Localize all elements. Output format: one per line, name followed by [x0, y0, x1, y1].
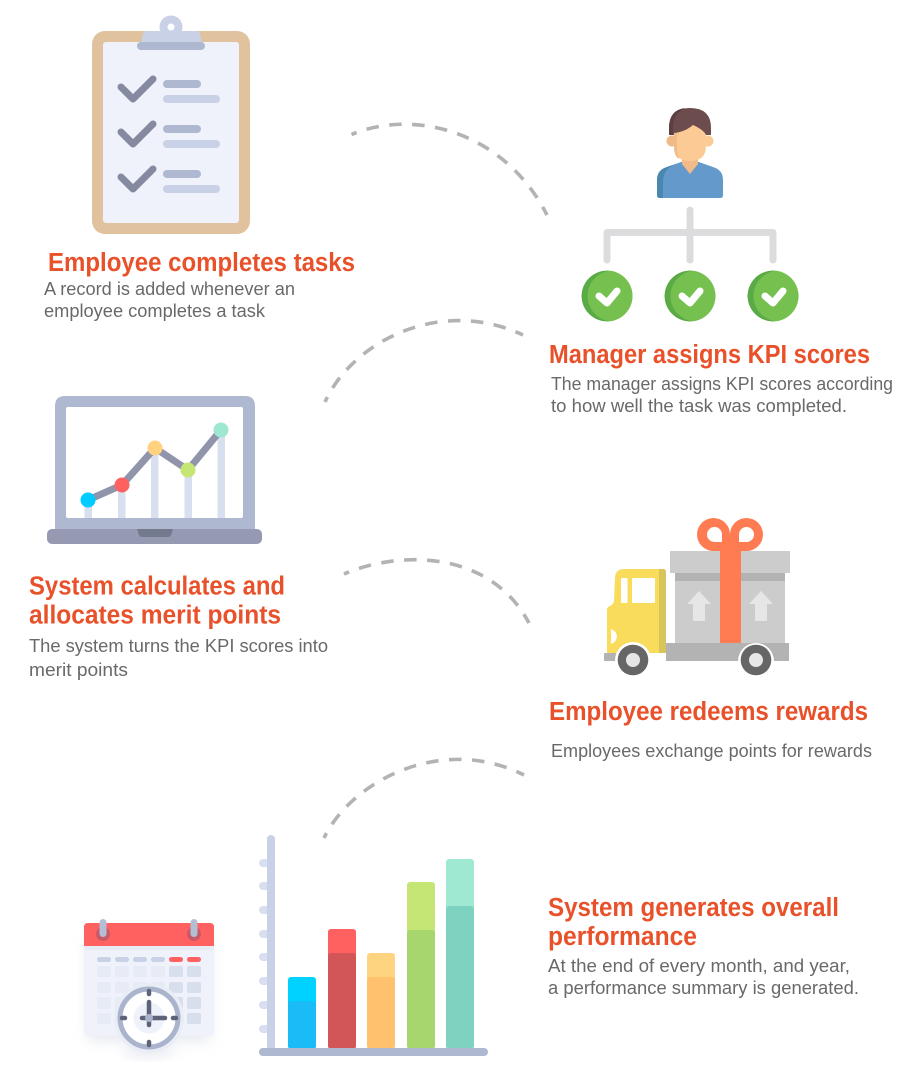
text: performance summary description: a performance summary is generated. — [548, 978, 859, 998]
heading: system calculates and allocates merit points: System calculates and — [29, 572, 285, 600]
text: performance summary description: At the end of every month, and year, — [548, 956, 850, 976]
text: merit points description: merit points — [29, 660, 128, 680]
text: KPI description — [551, 374, 893, 416]
chart: bar chart icon — [259, 835, 488, 1056]
heading: system generates overall performance: System generates overall — [548, 894, 839, 922]
icon: delivery truck with gift — [604, 518, 790, 678]
text: task record description: A record is added whenever an — [44, 279, 295, 299]
heading: employee completes tasks: Employee completes tasks — [48, 249, 355, 277]
icon: clipboard — [92, 16, 250, 234]
text: performance summary description — [548, 956, 859, 998]
text: KPI description: to how well the task was completed. — [551, 396, 847, 416]
arrow: tasks to manager — [352, 124, 547, 215]
icon: laptop with line chart — [47, 396, 262, 544]
icon: manager org chart — [582, 108, 804, 322]
arrow: rewards to performance — [324, 759, 524, 838]
text: rewards description: Employees exchange points for rewards — [551, 741, 872, 761]
heading: system generates overall performance: performance — [548, 923, 697, 951]
arrow: system to rewards — [344, 560, 529, 623]
icon: calendar with clock — [84, 919, 214, 1057]
heading: system generates overall performance — [548, 894, 839, 951]
text: merit points description — [29, 636, 328, 680]
heading: employee redeems rewards: Employee redeems rewards — [549, 698, 868, 726]
text: KPI description: The manager assigns KPI scores according — [551, 374, 893, 394]
heading: system calculates and allocates merit points: allocates merit points — [29, 602, 281, 630]
text: task record description: employee completes a task — [44, 301, 266, 321]
text: merit points description: The system turns the KPI scores into — [29, 636, 328, 656]
text: task record description — [44, 279, 295, 321]
heading: manager assigns KPI scores: Manager assigns KPI scores — [549, 341, 870, 369]
arrow: manager to system — [325, 321, 523, 402]
heading: system calculates and allocates merit points — [29, 572, 285, 630]
